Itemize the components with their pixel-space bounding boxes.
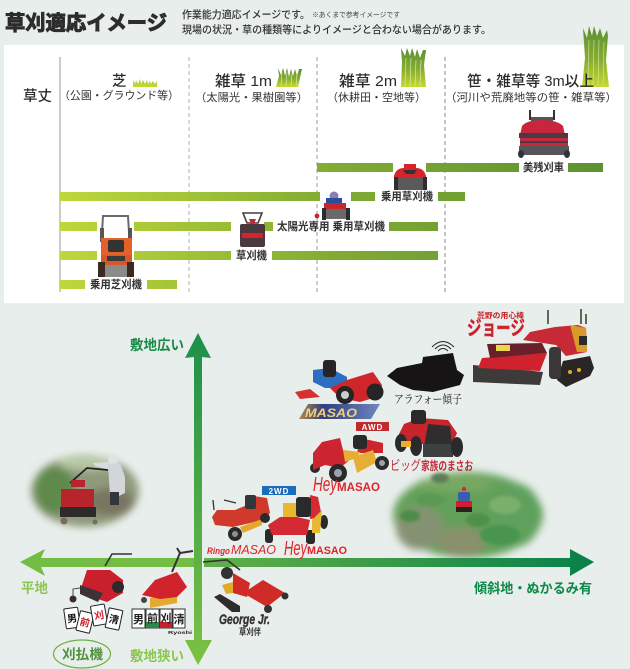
column heading: bamboo grass 3m xyxy=(445,72,617,104)
tag: AWD xyxy=(356,422,389,432)
logo: cards: 刈 xyxy=(93,608,105,623)
label: 乗用草刈機 xyxy=(381,189,433,203)
icon: 2m grass xyxy=(401,48,426,87)
column heading: weeds 2m: 雑草 2m xyxy=(339,73,397,90)
axis label: wide site: 敷地広い xyxy=(130,337,184,353)
column heading: turf xyxy=(59,73,179,102)
column heading: bamboo grass 3m: 笹・雑草等 3m以上 xyxy=(467,72,594,90)
tag: AWD: AWD xyxy=(362,423,383,432)
machine: Ringo MASAO xyxy=(207,495,276,557)
logo: MASAO xyxy=(231,542,276,557)
logo: 草刈伴 xyxy=(239,626,261,637)
column heading: turf: 芝 xyxy=(112,73,126,90)
machine: walk-behind cutter 2 xyxy=(132,548,193,635)
axis: horizontal arrow xyxy=(20,549,594,576)
logo: cards xyxy=(64,604,123,633)
machine: walk-behind mower xyxy=(236,213,267,262)
machine: solar riding mower xyxy=(277,192,385,233)
logo: MASAO xyxy=(337,482,380,494)
column heading: weeds 1m: （太陽光・果樹園等） xyxy=(195,90,308,104)
title: 草刈適応イメージ xyxy=(5,12,167,35)
column heading: weeds 1m: 雑草 1m xyxy=(215,73,272,90)
axis: vertical arrow xyxy=(185,333,212,665)
logo: cards: 前 xyxy=(147,611,158,625)
logo: cards: 男 xyxy=(66,612,78,626)
logo xyxy=(207,542,276,557)
machine: アラフォー傾子 silhouette: アラフォー傾子 xyxy=(394,393,462,406)
tag: 2WD xyxy=(262,486,296,496)
column heading: weeds 1m xyxy=(195,73,308,104)
axis label: grass height: 草丈 xyxy=(23,88,52,105)
logo: cards: 清 xyxy=(108,612,120,627)
description text: 作業能力適応イメージです。 xyxy=(182,8,310,21)
axis label: slopes and mud: 傾斜地・ぬかるみ有 xyxy=(474,580,592,596)
column heading: weeds 2m: （休耕田・空地等） xyxy=(327,90,426,104)
machine: ジョージ tracked mulcher: 荒野の用心棒 xyxy=(477,310,525,320)
label: 乗用芝刈機 xyxy=(90,277,142,291)
logo: cards xyxy=(132,609,192,635)
panel: grass height chart xyxy=(4,26,624,303)
description text xyxy=(182,8,491,36)
logo: cards: 前 xyxy=(78,615,91,630)
machine: Hey MASAO AWD xyxy=(310,435,389,496)
machine: アラフォー傾子 silhouette xyxy=(387,342,464,406)
label: 草刈機 xyxy=(236,248,267,262)
logo: Hey xyxy=(313,474,338,496)
icon: 3m grass xyxy=(582,26,609,87)
logo xyxy=(284,538,347,560)
logo xyxy=(390,458,473,473)
logo xyxy=(219,611,270,637)
column heading: turf: （公園・グラウンド等） xyxy=(59,88,179,102)
logo: cards: 清 xyxy=(174,612,184,626)
logo: cards: 刈 xyxy=(160,611,172,625)
machine: walk-behind cutter 1 xyxy=(64,554,132,633)
logo: cards: 男 xyxy=(133,613,144,626)
category: brush cutters: 刈払機 xyxy=(62,646,104,662)
machine: 美残刈車 xyxy=(518,110,570,174)
logo: cards: Ryoshi xyxy=(168,630,192,635)
logo xyxy=(313,474,380,496)
logo: MASAO xyxy=(307,545,347,557)
tag: 2WD: 2WD xyxy=(269,487,289,496)
label: 美残刈車 xyxy=(523,160,564,174)
column heading: weeds 2m xyxy=(327,73,426,104)
machine: ジョージ tracked mulcher: ジョージ xyxy=(467,318,525,340)
photo: riding mower on slope xyxy=(393,472,543,558)
axis label: narrow site: 敷地狭い xyxy=(130,648,184,664)
logo: Ringo xyxy=(207,546,230,557)
icon: 1m grass xyxy=(276,68,302,87)
machine: upper riding mower xyxy=(381,164,433,203)
label: 太陽光専用 乗用草刈機 xyxy=(277,219,385,233)
machine: Master MASAO xyxy=(295,360,384,420)
machine: Hey MASAO 2WD xyxy=(265,495,347,560)
description text: ※あくまで参考イメージです xyxy=(312,10,400,19)
photo: walk-behind brush cutter in field xyxy=(31,455,139,527)
machine: George Jr. xyxy=(203,560,288,637)
category: brush cutters xyxy=(54,640,110,668)
machine: 家族のまさお xyxy=(390,410,473,473)
icon: short grass xyxy=(133,79,157,87)
logo: 家族のまさお xyxy=(421,458,473,473)
logo: MASAO xyxy=(305,408,357,420)
logo: George Jr. xyxy=(219,611,270,627)
description text: 現場の状況・草の種類等によりイメージと合わない場合があります。 xyxy=(182,23,491,36)
axis label: flat land: 平地 xyxy=(21,580,48,596)
logo: ビッグ xyxy=(390,458,421,473)
logo: Hey xyxy=(284,538,308,560)
bars: capability ranges xyxy=(60,163,603,289)
machine: ジョージ tracked mulcher xyxy=(467,309,594,387)
machine: riding turf mower xyxy=(90,216,142,291)
column heading: bamboo grass 3m: （河川や荒廃地等の笹・雑草等） xyxy=(445,90,617,104)
